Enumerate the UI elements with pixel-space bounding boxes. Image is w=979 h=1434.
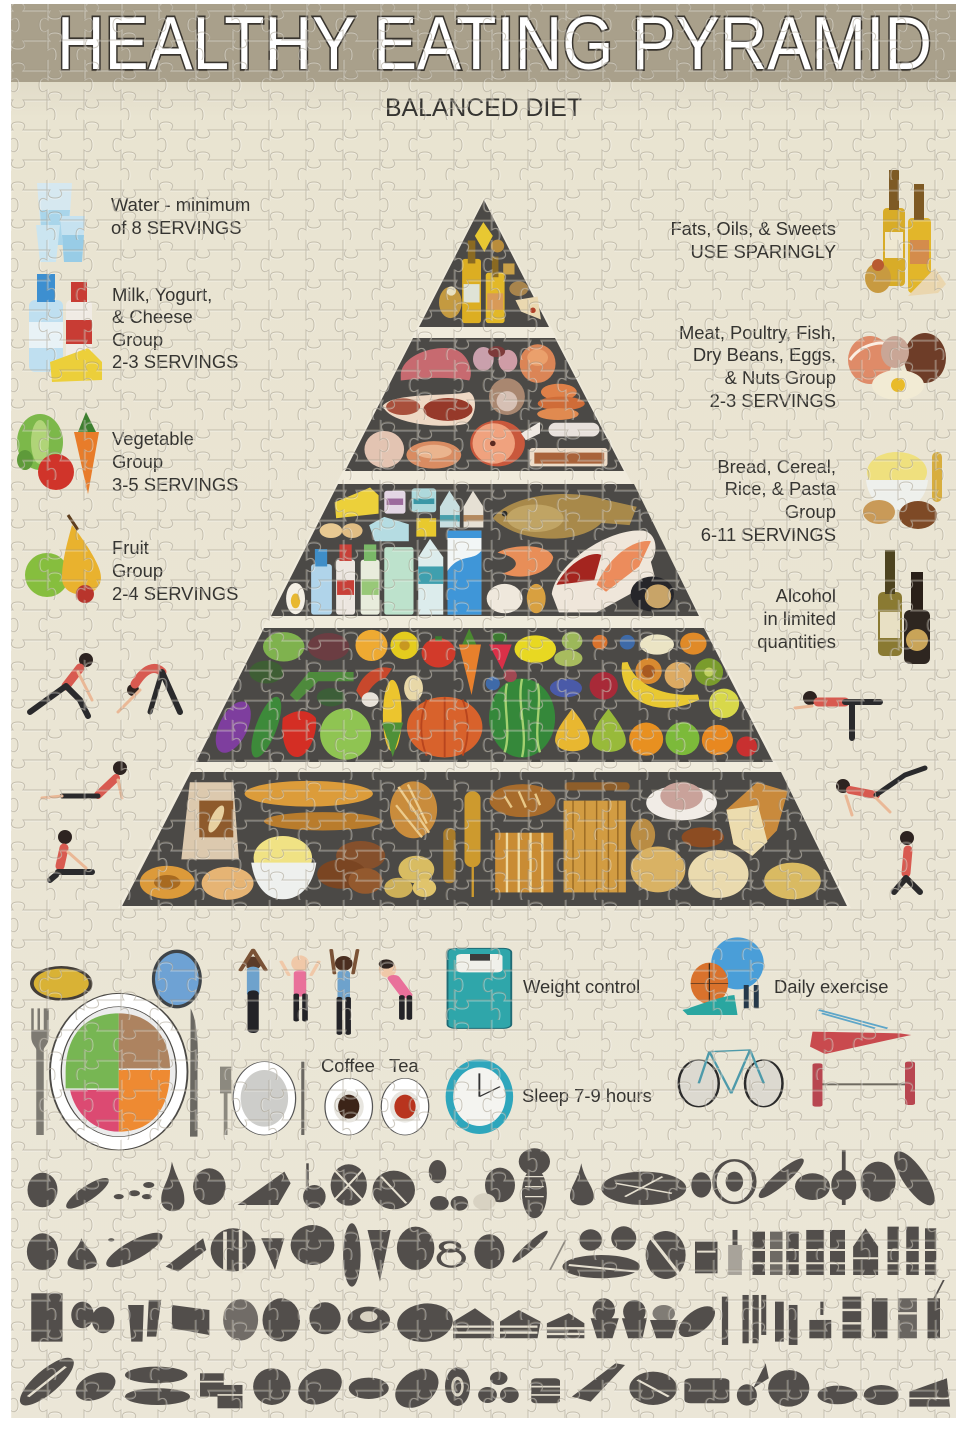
label: water: Water - minimum (111, 194, 250, 215)
figure: cobra (42, 761, 127, 798)
icon row: grains and sweets (31, 1280, 944, 1345)
tier: fats, oils and sweets (419, 200, 549, 327)
exercise figures right (795, 691, 925, 892)
label: meat: & Nuts Group (725, 367, 836, 388)
icon: barbell (812, 1062, 915, 1107)
icon: right meat (848, 333, 946, 400)
label: vegetable group: Group (112, 451, 163, 472)
label: fats: USE SPARINGLY (691, 241, 836, 262)
label: meat: 2-3 SERVINGS (710, 390, 836, 411)
label: sleep: Sleep 7-9 hours (522, 1085, 652, 1106)
icon: half cup oval (30, 966, 92, 1001)
label: vegetable group: Vegetable (112, 428, 194, 449)
label: bread: Bread, Cereal, (717, 456, 836, 477)
pyramid (118, 197, 851, 908)
label: tea: Tea (389, 1055, 419, 1076)
icon: fruit (25, 515, 101, 603)
label: vegetable group: 3-5 SERVINGS (112, 474, 238, 495)
left servings labels (111, 194, 250, 604)
tier: vegetables and fruit (196, 628, 773, 762)
right servings labels (670, 218, 837, 652)
icon: bicycle (679, 1050, 782, 1107)
icon: coffee cup (325, 1078, 372, 1135)
label: bread: Rice, & Pasta (725, 478, 837, 499)
label: milk group: Group (112, 329, 163, 350)
icon row: fruit (28, 1148, 943, 1218)
label: daily exercise: Daily exercise (774, 976, 888, 997)
small setting (220, 1062, 304, 1135)
exercise figures left (30, 653, 180, 880)
icon: water glasses (36, 183, 85, 262)
subtitle: BALANCED DIET (385, 94, 582, 122)
silhouette food icons (10, 1148, 950, 1410)
icon: right oil bottles (865, 170, 946, 296)
label: bread: Group (785, 501, 836, 522)
label: alcohol: Alcohol (776, 585, 836, 606)
icon: exercise mat and band (810, 1010, 911, 1054)
label: weight control: Weight control (523, 976, 640, 997)
icon: tea cup (381, 1078, 429, 1135)
icon: water oval (152, 950, 202, 1008)
label: meat: Dry Beans, Eggs, (693, 344, 836, 365)
icon: knife (190, 1008, 198, 1137)
icon: milk and cheese (29, 274, 102, 382)
figure: lunge (30, 653, 93, 716)
figure: balance (795, 691, 880, 738)
icon: right bread and rice (863, 452, 942, 529)
healthy plate section (30, 937, 915, 1150)
icon: people exercising (241, 950, 409, 1033)
label: fruit group: 2-4 SERVINGS (112, 583, 238, 604)
title banner (11, 1, 956, 85)
tier: milk, yogurt, cheese and fish (271, 484, 699, 616)
figure: plank (836, 768, 925, 815)
icon: wall clock (446, 1059, 513, 1134)
icon row: vegetables and bottles (27, 1223, 936, 1287)
figure: seated (50, 830, 92, 880)
label: bread: 6-11 SERVINGS (701, 524, 836, 545)
plate (50, 993, 188, 1150)
tier: meat, poultry, fish, beans (345, 338, 624, 471)
label: milk group: 2-3 SERVINGS (112, 351, 238, 372)
label: alcohol: quantities (757, 631, 836, 652)
icon row: seafood and meat (10, 1354, 950, 1410)
icon: fork (31, 1008, 49, 1135)
figure: kneeling (894, 831, 920, 892)
icon: vegetables (17, 412, 99, 494)
label: milk group: & Cheese (112, 306, 193, 327)
label: fruit group: Fruit (112, 537, 149, 558)
label: fats: Fats, Oils, & Sweets (670, 218, 836, 239)
icon: weighing scale (448, 948, 511, 1028)
tier: bread, cereal, rice and pasta (122, 772, 847, 906)
label: water: of 8 SERVINGS (111, 217, 242, 238)
label: fruit group: Group (112, 560, 163, 581)
label: alcohol: in limited (763, 608, 836, 629)
label: milk group: Milk, Yogurt, (112, 284, 212, 305)
icon: sports gear (682, 937, 764, 1015)
figure: downward bend (118, 668, 180, 712)
label: coffee: Coffee (321, 1055, 375, 1076)
icon: right alcohol bottles (878, 550, 930, 664)
label: meat: Meat, Poultry, Fish, (679, 322, 836, 343)
